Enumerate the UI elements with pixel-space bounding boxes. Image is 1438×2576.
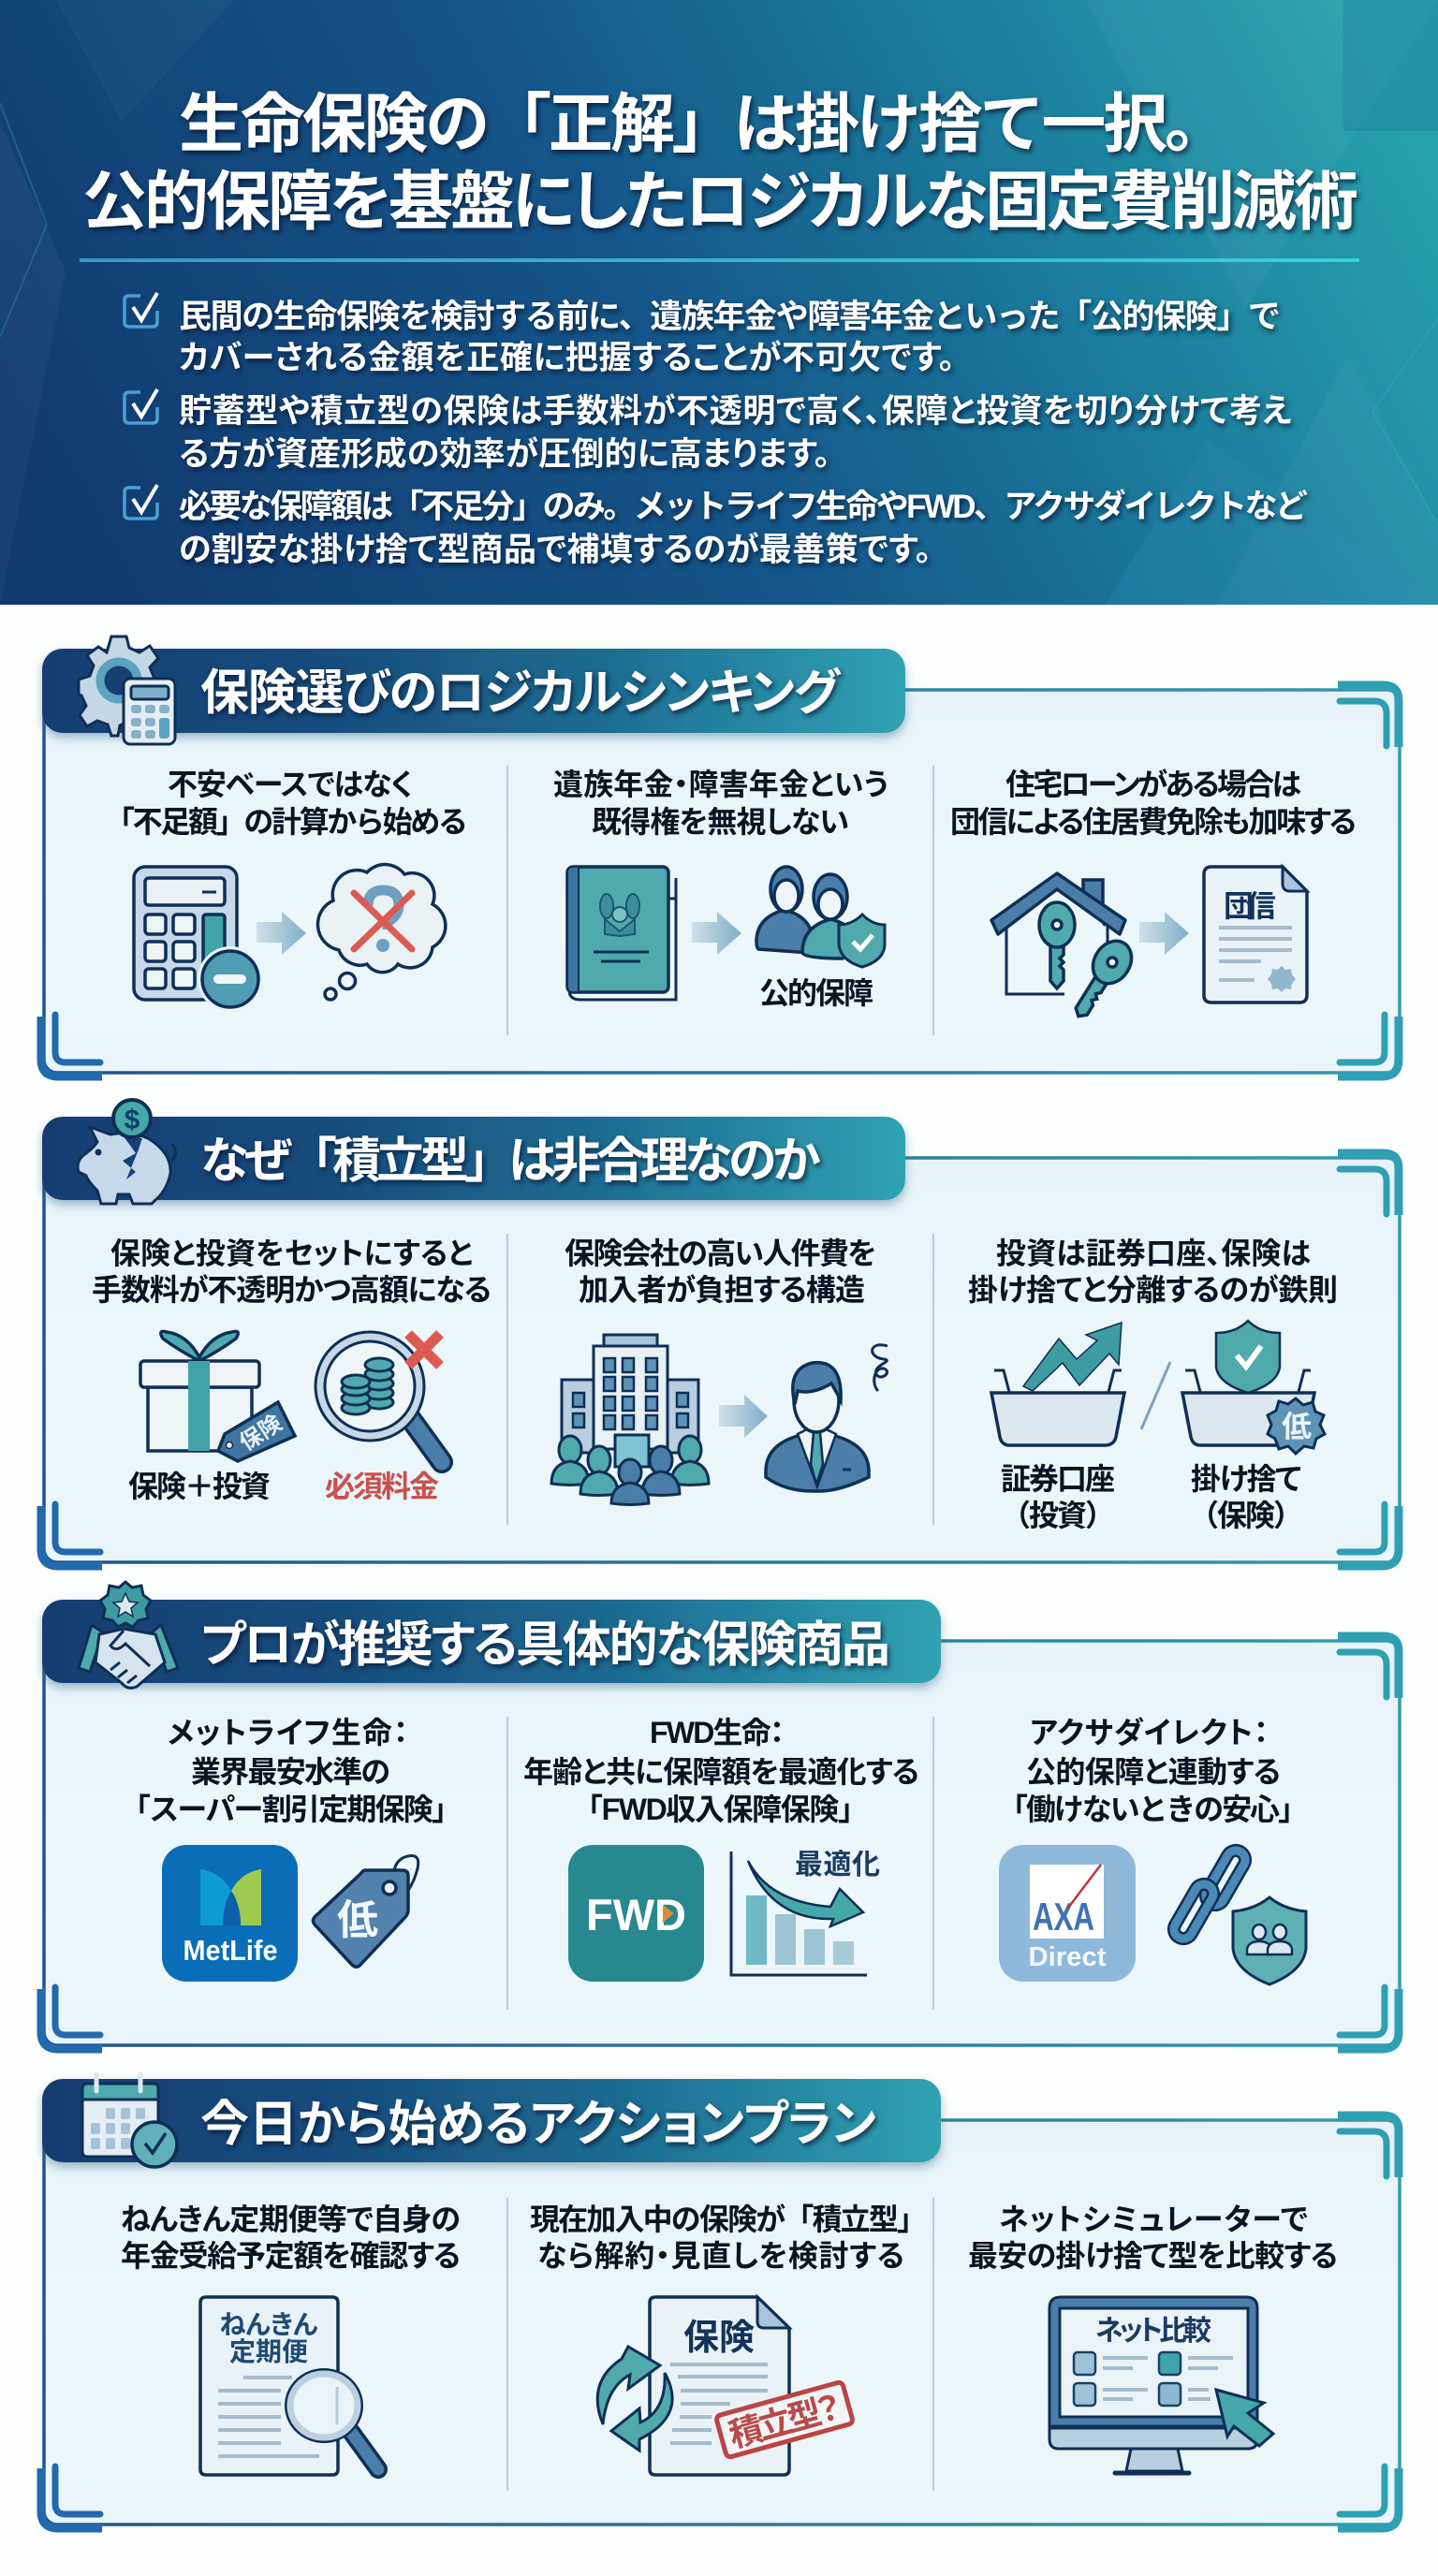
heading bar [42, 649, 905, 733]
title: 生命保険の「正解」は掛け捨て一択。 [179, 88, 1229, 160]
logo: MetLife: MetLife [183, 1934, 277, 1967]
column 3 text [968, 1237, 1338, 1307]
column 2 text: 既得権を無視しない [592, 805, 849, 839]
icon: worried businessman [766, 1345, 888, 1491]
icon: insurance policy with cycle and stamp [597, 2297, 854, 2475]
bullet 3: 必要な保障額は「不足分」のみ。メットライフ生命やFWD、アクサダイレクトなど [179, 488, 1308, 525]
icon: insurance policy with cycle and stamp: 保険 [683, 2319, 755, 2358]
icon: pension notice with magnifier: 定期便 [229, 2337, 308, 2366]
icon: calculator minus [134, 867, 263, 1012]
panel: action plan [41, 2074, 1400, 2528]
column 2 text [553, 768, 888, 839]
arrow [1139, 912, 1189, 955]
column 1 text: 手数料が不透明かつ高額になる [92, 1273, 492, 1307]
column 3 text: 住宅ローンがある場合は [1005, 768, 1301, 801]
icon: term insurance basket [1182, 1321, 1325, 1454]
chart: optimizing coverage [731, 1850, 880, 1975]
slash [1141, 1362, 1170, 1429]
labels: （投資） [1001, 1499, 1115, 1532]
column 3 text [998, 1716, 1308, 1826]
title [82, 88, 1358, 238]
column 1 text: メットライフ生命： [168, 1716, 408, 1749]
column 2 text: なら解約・見直しを検討する [537, 2239, 904, 2273]
labels: 証券口座 [1001, 1462, 1115, 1496]
column 3 text: アクサダイレクト： [1030, 1716, 1269, 1749]
column 3 text: 「働けないときの安心」 [998, 1793, 1308, 1826]
column 3 text: 公的保障と連動する [1026, 1755, 1281, 1789]
header banner [0, 0, 1438, 605]
icon: gear and calculator [79, 637, 175, 744]
icon: broken piggy bank: $ [125, 1105, 140, 1135]
column 1 text: 業界最安水準の [191, 1755, 390, 1789]
bullet 2: 貯蓄型や積立型の保険は手数料が不透明で高く、保障と投資を切り分けて考え [179, 393, 1292, 430]
column 1 text: 保険と投資をセットにすると [110, 1237, 473, 1270]
heading bar: 保険選びのロジカルシンキング [200, 666, 842, 721]
logo: AXA Direct: Direct [1028, 1942, 1107, 1972]
label: required fee: 必須料金 [325, 1470, 439, 1503]
heading bar [42, 1117, 905, 1200]
column 2 text: 加入者が負担する構造 [579, 1273, 865, 1307]
summary bullets [125, 293, 1308, 568]
labels: 掛け捨て [1191, 1462, 1301, 1496]
column 3 text: ネットシミュレーターで [999, 2203, 1308, 2236]
icon: monitor with comparison: ネット比較 [1095, 2316, 1211, 2347]
heading bar: 今日から始めるアクションプラン [200, 2098, 876, 2152]
bullet 1: カバーされる金額を正確に把握することが不可欠です。 [179, 340, 955, 376]
column 2 text: 「FWD収入保障保険」 [573, 1793, 868, 1826]
icon: monitor with comparison [1049, 2297, 1273, 2473]
bullet 3: の割安な掛け捨て型商品で補填するのが最善策です。 [179, 532, 932, 568]
column 2 text [530, 2203, 927, 2273]
column 1 text [121, 1716, 462, 1826]
heading bar: プロが推奨する具体的な保険商品 [200, 1618, 890, 1673]
column 1 text [92, 1237, 492, 1307]
column 3 text: 掛け捨てと分離するのが鉄則 [968, 1273, 1338, 1307]
column 2 text: 年齢と共に保障額を最適化する [523, 1755, 919, 1789]
icon: low price tag [313, 1855, 418, 1967]
icon: office building and crowd [551, 1335, 709, 1505]
label: 公的保障 [759, 976, 873, 1010]
icon: magnifier over coins [315, 1332, 442, 1462]
heading bar [42, 1600, 941, 1683]
icon: low price tag: 低 [337, 1897, 378, 1943]
heading bar [42, 2079, 941, 2162]
bullet 1 [125, 293, 1281, 376]
column 3 text [968, 2203, 1338, 2273]
column 2 text [523, 1716, 919, 1826]
column 2 text: 現在加入中の保険が「積立型」 [530, 2203, 927, 2236]
column 1 text: 年金受給予定額を確認する [121, 2239, 461, 2273]
icon: term insurance basket: 低 [1282, 1410, 1312, 1443]
bullet 1: 民間の生命保険を検討する前に、遺族年金や障害年金といった「公的保険」で [179, 299, 1281, 335]
column 2 text: FWD生命： [650, 1716, 785, 1749]
column 1 text [121, 2203, 461, 2273]
arrow [692, 912, 741, 955]
logo: FWD: FWD [586, 1890, 686, 1939]
icon: securities basket [991, 1323, 1124, 1445]
arrow [719, 1395, 768, 1438]
icon: insurance policy with cycle and stamp: 積立型？ [725, 2387, 845, 2454]
column 1 text [105, 768, 468, 839]
bullet 2: る方が資産形成の効率が圧倒的に高まります。 [179, 436, 830, 473]
icon: handshake with badge [79, 1582, 178, 1688]
icon: gift with insurance tag: 保険 [235, 1411, 286, 1456]
icon: family with shield [756, 867, 885, 967]
logo: AXA Direct: AXA [1033, 1895, 1094, 1939]
column 1 text: 「スーパー割引定期保険」 [121, 1793, 462, 1826]
column 1 text: 「不足額」の計算から始める [105, 805, 468, 839]
icon: pension book [567, 867, 676, 1000]
bullet 2 [125, 389, 1292, 473]
icon: gift with insurance tag [140, 1331, 295, 1461]
panel: why accumulation is irrational [41, 1100, 1400, 1566]
heading bar: なぜ「積立型」は非合理なのか [200, 1134, 821, 1189]
title: 公的保障を基盤にしたロジカルな固定費削減術 [82, 166, 1358, 238]
column 3 text: 団信による住居費免除も加味する [950, 805, 1357, 839]
icon: credit life document [1204, 867, 1307, 1003]
labels [1001, 1462, 1303, 1532]
icon: pension notice with magnifier [200, 2297, 378, 2475]
label: 保険＋投資 [128, 1470, 271, 1503]
bullet 3 [125, 485, 1308, 568]
panel: logical thinking [41, 637, 1400, 1076]
column 3 text [950, 768, 1357, 839]
icon: worry cloud crossed [317, 865, 446, 1000]
column 3 text: 最安の掛け捨て型を比較する [968, 2239, 1338, 2273]
logo: FWD [568, 1845, 704, 1982]
column 1 text: 不安ベースではなく [168, 768, 413, 801]
icon: credit life document: 団信 [1224, 889, 1276, 923]
icon: house and keys [991, 873, 1139, 1026]
labels: （保険） [1189, 1499, 1303, 1532]
logo: MetLife [162, 1845, 298, 1982]
column 2 text [565, 1237, 876, 1307]
arrow [257, 912, 306, 955]
icon: calendar with check [82, 2074, 177, 2167]
column 2 text: 保険会社の高い人件費を [565, 1237, 876, 1270]
chart: optimizing coverage: 最適化 [795, 1850, 880, 1881]
logo: AXA Direct [999, 1845, 1136, 1982]
column 2 text: 遺族年金・障害年金という [553, 768, 888, 801]
icon: broken piggy bank [78, 1100, 176, 1204]
column 3 text: 投資は証券口座、保険は [996, 1237, 1311, 1270]
icon: chain and shield [1170, 1847, 1306, 1984]
panel: recommended products [41, 1582, 1400, 2049]
column 1 text: ねんきん定期便等で自身の [121, 2203, 461, 2236]
icon: pension notice with magnifier: ねんきん [220, 2310, 317, 2339]
